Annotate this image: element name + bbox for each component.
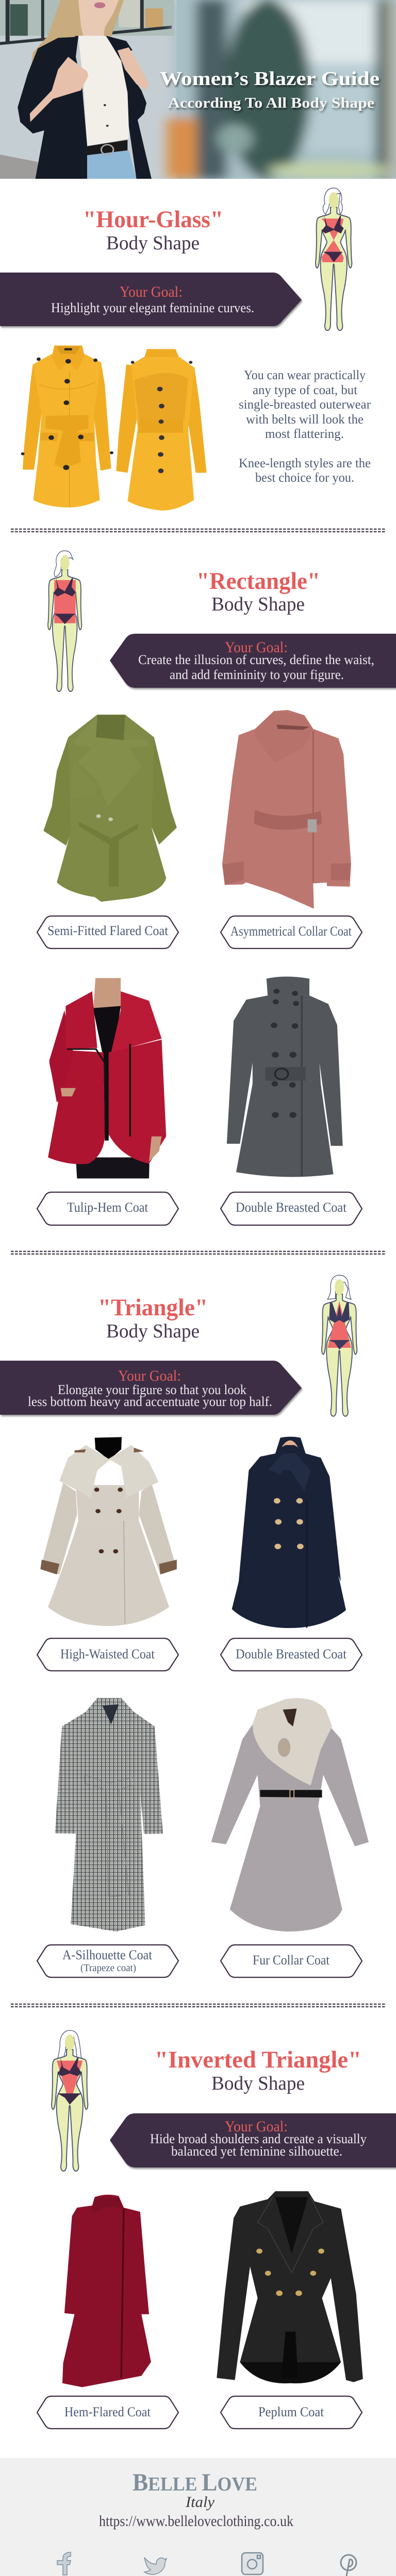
text block: hour-glass advice: with belts will look the — [246, 413, 364, 427]
olive semi-fitted flared coat — [43, 715, 177, 902]
pill: peplum coat: Peplum Coat — [258, 2404, 324, 2419]
pill: peplum coat — [221, 2396, 362, 2429]
panel: inverted triangle goal banner: Your Goal: — [225, 2118, 288, 2135]
icon: instagram — [242, 2553, 263, 2574]
panel: triangle goal banner: Your Goal: — [118, 1367, 181, 1384]
pill: semi-fitted flared coat — [37, 916, 178, 948]
pill: asymmetrical collar coat — [221, 916, 362, 948]
text block: hour-glass advice — [239, 368, 371, 485]
pink asymmetrical collar coat — [222, 710, 351, 909]
panel: footer — [0, 2458, 396, 2576]
pill: hem-flared coat — [37, 2396, 178, 2429]
logo: belle love italy — [133, 2469, 257, 2511]
panel: inverted triangle goal banner: balanced yet feminine silhouette. — [171, 2144, 342, 2159]
hero subtitle: According To All Body Shape — [168, 95, 374, 111]
panel: hour-glass goal banner: Your Goal: — [120, 283, 183, 300]
panel: hour-glass goal banner — [0, 273, 302, 326]
icon: twitter — [144, 2557, 167, 2574]
icon: hour-glass body figure — [316, 188, 352, 330]
burgundy hem-flared coat — [62, 2195, 151, 2387]
heading: triangle — [98, 1294, 208, 1342]
red tulip-hem coat — [48, 978, 166, 1178]
icon: rectangle body figure — [48, 551, 81, 691]
pill: double breasted coat — [221, 1638, 362, 1671]
pill: semi-fitted flared coat: Semi-Fitted Flared Coat — [47, 923, 169, 938]
heading: triangle: "Triangle" — [98, 1294, 208, 1321]
navy double breasted coat — [232, 1437, 346, 1628]
text block: hour-glass advice: most flattering. — [265, 427, 344, 441]
grey fur collar coat — [211, 1698, 369, 1931]
panel: inverted triangle goal banner — [110, 2113, 396, 2167]
beige high-waisted coat — [40, 1437, 177, 1626]
icon: triangle body figure — [322, 1275, 357, 1416]
pill: double breasted coat: Double Breasted Coat — [236, 1647, 347, 1662]
text block: hour-glass advice: any type of coat, but — [253, 383, 357, 397]
logo: belle love italy: Italy — [185, 2494, 215, 2511]
pill: hem-flared coat: Hem-Flared Coat — [64, 2404, 151, 2419]
pill: tulip-hem coat: Tulip-Hem Coat — [67, 1200, 148, 1215]
pill: high-waisted coat: High-Waisted Coat — [60, 1647, 155, 1662]
pill: double breasted coat — [221, 1192, 362, 1225]
grey double breasted coat — [227, 977, 343, 1177]
text block: hour-glass advice: You can wear practically — [244, 368, 366, 382]
icon: facebook — [57, 2552, 71, 2575]
panel: rectangle goal banner: and add femininity to your figure. — [170, 667, 344, 682]
panel: hour-glass goal banner: Highlight your elegant feminine curves. — [51, 300, 254, 315]
heading: rectangle: Body Shape — [211, 594, 305, 615]
logo: belle love italy: BELLE LOVE — [133, 2469, 257, 2496]
pill: double breasted coat: Double Breasted Coat — [236, 1200, 347, 1215]
pill: asymmetrical collar coat: Asymmetrical Collar Coat — [230, 924, 352, 939]
text block: hour-glass advice: single-breasted outerwear — [239, 398, 371, 412]
pill: fur collar coat — [221, 1945, 362, 1977]
hero banner with photo — [0, 0, 396, 179]
yellow coat back — [116, 349, 207, 511]
heading: inverted triangle: "Inverted Triangle" — [155, 2046, 361, 2073]
panel: triangle goal banner — [0, 1361, 302, 1415]
heading: inverted triangle — [155, 2046, 361, 2094]
text block: hour-glass advice: best choice for you. — [255, 471, 354, 485]
heading: rectangle: "Rectangle" — [196, 568, 320, 595]
pill: a-silhouette coat: A-Silhouette Coat — [62, 1947, 153, 1962]
panel: rectangle goal banner: Create the illusion of curves, define the waist, — [138, 652, 374, 667]
panel: triangle goal banner: Elongate your figure so that you look — [58, 1382, 246, 1397]
heading: inverted triangle: Body Shape — [211, 2073, 305, 2094]
hero title: Women’s Blazer Guide — [160, 68, 380, 90]
pill: tulip-hem coat — [37, 1192, 178, 1225]
heading: hour-glass: "Hour-Glass" — [83, 206, 223, 233]
icon: inverted triangle body figure — [52, 2030, 88, 2171]
heading: rectangle — [196, 568, 320, 615]
pill: a-silhouette coat — [37, 1945, 178, 1977]
pill: fur collar coat: Fur Collar Coat — [253, 1953, 330, 1968]
pill: a-silhouette coat: (Trapeze coat) — [80, 1962, 136, 1974]
pill: high-waisted coat — [37, 1638, 178, 1671]
heading: hour-glass — [83, 206, 223, 254]
panel: inverted triangle goal banner: Hide broad shoulders and create a visually — [150, 2131, 367, 2146]
heading: triangle: Body Shape — [106, 1320, 200, 1342]
text block: hour-glass advice: Knee-length styles are the — [239, 456, 371, 470]
checked a-silhouette coat — [55, 1698, 163, 1931]
black peplum coat — [217, 2191, 363, 2383]
icon: pinterest — [341, 2555, 356, 2576]
yellow coat front — [21, 346, 113, 507]
panel: rectangle goal banner: Your Goal: — [225, 639, 288, 656]
heading: hour-glass: Body Shape — [106, 232, 200, 254]
panel: triangle goal banner: less bottom heavy and accentuate your top half. — [28, 1394, 272, 1409]
website url: https://www.belleloveclothing.co.uk — [99, 2513, 293, 2530]
panel: rectangle goal banner — [110, 634, 396, 688]
